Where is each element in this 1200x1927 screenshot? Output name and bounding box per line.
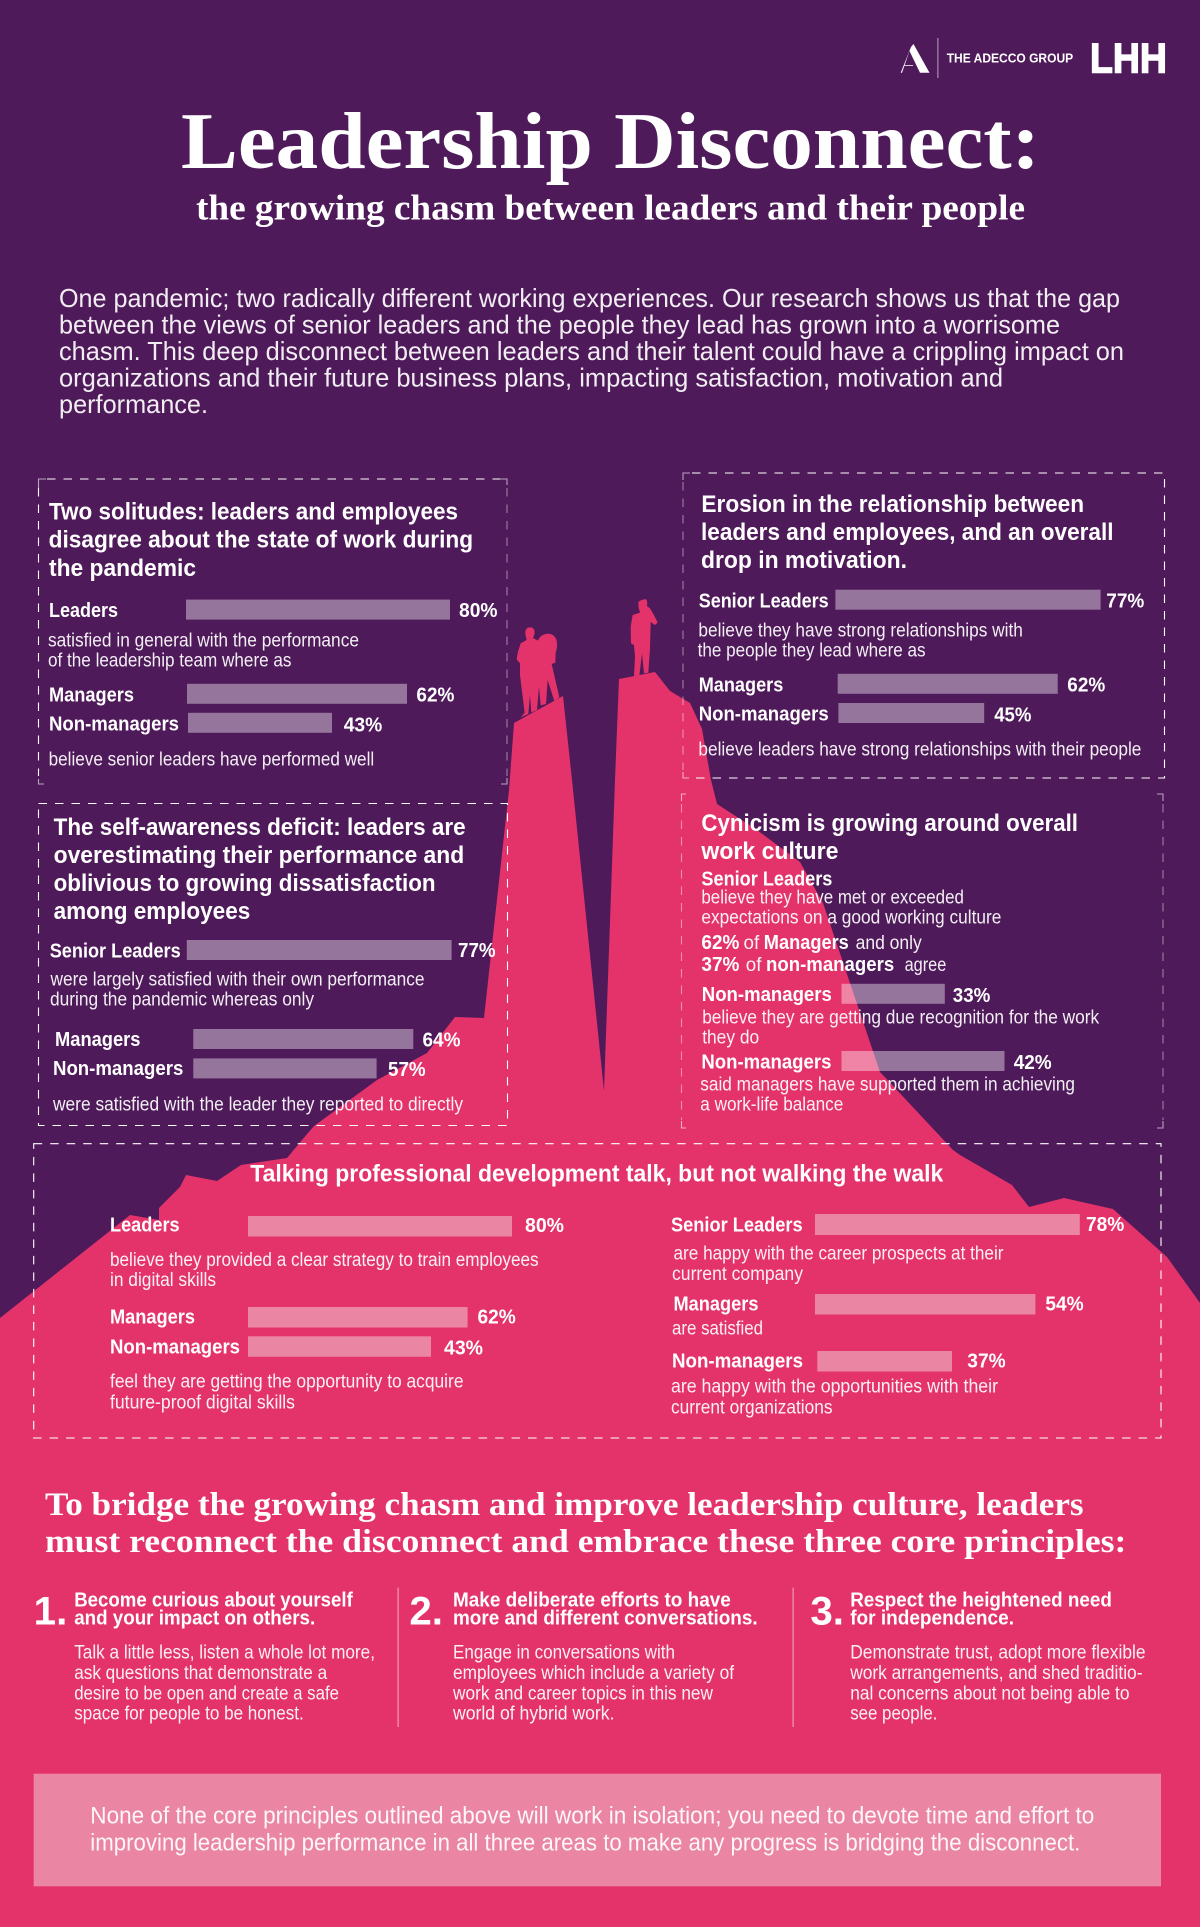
bar: managers 62%: 62% bbox=[1067, 675, 1106, 697]
description: satisfied in general with the performance bbox=[48, 630, 359, 652]
intro paragraph bbox=[59, 283, 1124, 419]
description bbox=[700, 1074, 1075, 1116]
panel: cynicism bbox=[682, 794, 1163, 1128]
intro paragraph: organizations and their future business plans, impacting satisfaction, motivation and bbox=[59, 362, 1003, 392]
managers and non-managers statement: agree bbox=[905, 955, 946, 976]
heading: cynicism: Cynicism is growing around overall bbox=[701, 810, 1078, 837]
managers and non-managers statement: of bbox=[744, 933, 760, 954]
heading: erosion: Erosion in the relationship between bbox=[701, 491, 1084, 518]
intro paragraph: One pandemic; two radically different working experiences. Our research shows us that the gap bbox=[59, 283, 1120, 313]
bar: leaders 80%: Leaders bbox=[110, 1215, 180, 1237]
principle 3 body: see people. bbox=[850, 1703, 937, 1724]
principle 1: 1. bbox=[34, 1589, 67, 1633]
principle 1 body: space for people to be honest. bbox=[74, 1703, 304, 1724]
icon: two leaders silhouette bbox=[517, 627, 559, 717]
principle 2 body: Engage in conversations with bbox=[453, 1642, 675, 1663]
managers and non-managers statement: 62% bbox=[701, 932, 740, 954]
description bbox=[50, 970, 425, 1010]
description: future-proof digital skills bbox=[110, 1392, 295, 1413]
senior leaders statement: Senior Leaders bbox=[701, 868, 832, 890]
description bbox=[48, 630, 359, 671]
principle 2 heading bbox=[453, 1590, 758, 1630]
bar: managers 62%: 62% bbox=[478, 1307, 516, 1329]
heading: erosion: leaders and employees, and an overall bbox=[701, 519, 1114, 546]
bar: non-managers 43%: 43% bbox=[444, 1337, 483, 1359]
description bbox=[671, 1376, 999, 1418]
principle 1 heading bbox=[74, 1590, 353, 1630]
bar: non-managers 42% bbox=[701, 1051, 1052, 1074]
description: believe they are getting due recognition for the work bbox=[702, 1007, 1100, 1028]
panel: two solitudes bbox=[38, 479, 507, 784]
heading: self-awareness deficit: oblivious to growing dissatisfaction bbox=[54, 870, 436, 897]
description: current company bbox=[672, 1264, 803, 1285]
principle 2 heading: more and different conversations. bbox=[453, 1608, 758, 1630]
description: in digital skills bbox=[110, 1270, 216, 1291]
intro paragraph: chasm. This deep disconnect between leaders and their talent could have a crippling impact on bbox=[59, 336, 1124, 366]
managers and non-managers statement bbox=[701, 932, 946, 976]
callout: None of the core principles outlined above will work in isolation; you need to devote time and effort to bbox=[90, 1802, 1094, 1829]
heading: three core principles: To bridge the growing chasm and improve leadership culture, leaders bbox=[45, 1487, 1084, 1523]
bar: managers 62% bbox=[699, 674, 1106, 697]
description: current organizations bbox=[671, 1397, 832, 1418]
principle 3 bbox=[810, 1589, 1146, 1724]
managers and non-managers statement: Managers bbox=[764, 932, 849, 954]
bar: non-managers 57%: Non-managers bbox=[53, 1058, 183, 1080]
bar: leaders 80%: 80% bbox=[459, 600, 498, 622]
description: during the pandemic whereas only bbox=[50, 990, 314, 1010]
callout bbox=[34, 1774, 1161, 1886]
principle 3: 3. bbox=[810, 1589, 844, 1633]
description: are happy with the opportunities with their bbox=[671, 1376, 999, 1397]
bar: senior leaders 77% bbox=[50, 940, 496, 962]
panel: self-awareness deficit bbox=[38, 804, 508, 1126]
logo: The Adecco Group and LHH bbox=[901, 35, 1167, 82]
heading: three core principles bbox=[45, 1487, 1126, 1560]
bar: senior leaders 77%: 77% bbox=[458, 940, 496, 962]
callout: improving leadership performance in all three areas to make any progress is bridging the disconnect. bbox=[90, 1830, 1080, 1857]
bar: non-managers 42%: Non-managers bbox=[701, 1051, 831, 1073]
bar: non-managers 37%: 37% bbox=[967, 1351, 1006, 1373]
principle 3 body: work arrangements, and shed traditio- bbox=[849, 1663, 1142, 1684]
description: they do bbox=[702, 1027, 759, 1048]
bar: non-managers 37%: Non-managers bbox=[672, 1351, 803, 1373]
managers and non-managers statement: 37% bbox=[701, 954, 740, 976]
senior leaders statement: believe they have met or exceeded bbox=[701, 888, 964, 909]
principle 2 body bbox=[452, 1642, 735, 1724]
managers and non-managers statement: non-managers bbox=[766, 954, 894, 976]
principle 1 heading: and your impact on others. bbox=[74, 1608, 315, 1630]
description bbox=[110, 1372, 464, 1413]
description bbox=[110, 1250, 539, 1291]
bar: leaders 80%: 80% bbox=[525, 1215, 564, 1237]
bar: non-managers 45% bbox=[699, 703, 1032, 726]
bar: senior leaders 77%: 77% bbox=[1106, 590, 1145, 612]
subtitle: the growing chasm between leaders and their people bbox=[196, 187, 1025, 227]
description: the people they lead where as bbox=[698, 640, 926, 661]
principle 1 body: Talk a little less, listen a whole lot more, bbox=[74, 1642, 375, 1663]
bar: non-managers 57% bbox=[53, 1058, 426, 1081]
bar: managers 64%: 64% bbox=[422, 1029, 461, 1051]
principle 2 body: work and career topics in this new bbox=[452, 1683, 713, 1704]
description: believe they have strong relationships with bbox=[698, 620, 1023, 642]
heading: self-awareness deficit: among employees bbox=[54, 898, 250, 925]
bar: senior leaders 78%: 78% bbox=[1086, 1214, 1125, 1236]
intro paragraph: between the views of senior leaders and the people they lead has grown into a worrisome bbox=[59, 310, 1060, 340]
principle 2 body: employees which include a variety of bbox=[453, 1663, 735, 1684]
bar: leaders 80% bbox=[110, 1215, 564, 1237]
bar: senior leaders 78% bbox=[671, 1214, 1125, 1236]
heading: two solitudes: the pandemic bbox=[49, 555, 196, 582]
principle 3 heading bbox=[850, 1590, 1112, 1630]
description: believe leaders have strong relationships with their people bbox=[698, 739, 1141, 760]
principle 2 heading: Make deliberate efforts to have bbox=[453, 1590, 731, 1612]
bar: senior leaders 77%: Senior Leaders bbox=[50, 940, 181, 962]
bar: managers 64%: Managers bbox=[55, 1029, 140, 1051]
bar: non-managers 43% bbox=[110, 1336, 483, 1359]
bar: non-managers 43%: Non-managers bbox=[110, 1336, 240, 1358]
principle 1 body: desire to be open and create a safe bbox=[74, 1683, 339, 1704]
panel: erosion in the relationship bbox=[683, 473, 1164, 778]
heading: two solitudes: disagree about the state of work during bbox=[49, 527, 473, 554]
heading: three core principles: must reconnect the disconnect and embrace these three core principles: bbox=[45, 1524, 1126, 1560]
heading: erosion: drop in motivation. bbox=[701, 547, 907, 574]
bar: non-managers 45%: 45% bbox=[994, 704, 1032, 726]
heading: two solitudes: Two solitudes: leaders and employees bbox=[49, 498, 458, 525]
principle 1 heading: Become curious about yourself bbox=[74, 1590, 353, 1612]
principle 3 heading: for independence. bbox=[850, 1608, 1014, 1630]
managers and non-managers statement: of bbox=[746, 955, 762, 976]
bar: non-managers 43% bbox=[49, 713, 382, 736]
bar: managers 62% bbox=[49, 684, 455, 706]
bar: non-managers 33%: 33% bbox=[953, 985, 991, 1007]
principle 3 heading: Respect the heightened need bbox=[850, 1590, 1112, 1612]
senior leaders statement bbox=[701, 868, 1001, 929]
bar: managers 62%: Managers bbox=[699, 675, 783, 697]
bar: non-managers 37% bbox=[672, 1351, 1006, 1373]
bar: leaders 80% bbox=[49, 600, 498, 622]
heading: self-awareness deficit: overestimating their performance and bbox=[54, 842, 464, 869]
description: are satisfied bbox=[672, 1318, 763, 1339]
logo: The Adecco Group and LHH: THE ADECCO GROUP bbox=[947, 51, 1073, 65]
principle 2: 2. bbox=[409, 1589, 443, 1633]
description: feel they are getting the opportunity to acquire bbox=[110, 1372, 464, 1393]
heading: cynicism bbox=[700, 810, 1078, 865]
bar: non-managers 43%: Non-managers bbox=[49, 714, 179, 736]
description: of the leadership team where as bbox=[48, 650, 292, 671]
description: a work-life balance bbox=[700, 1094, 843, 1116]
heading: self-awareness deficit bbox=[54, 814, 466, 925]
description: were satisfied with the leader they reported to directly bbox=[52, 1094, 463, 1116]
mountain chasm illustration bbox=[0, 599, 1200, 1927]
bar: senior leaders 77%: Senior Leaders bbox=[699, 590, 829, 612]
managers and non-managers statement: and only bbox=[856, 933, 922, 954]
bar: non-managers 33% bbox=[702, 984, 991, 1007]
bar: senior leaders 78%: Senior Leaders bbox=[671, 1214, 803, 1236]
panel: professional development bbox=[34, 1144, 1161, 1438]
description: are happy with the career prospects at their bbox=[674, 1244, 1004, 1265]
principle 1 body: ask questions that demonstrate a bbox=[74, 1663, 328, 1684]
mountain shape bbox=[0, 672, 1200, 1927]
bar: managers 62%: Managers bbox=[49, 684, 134, 706]
bar: non-managers 57%: 57% bbox=[388, 1059, 426, 1081]
description: said managers have supported them in achieving bbox=[700, 1074, 1075, 1096]
bar: non-managers 45%: Non-managers bbox=[699, 704, 829, 726]
bar: non-managers 43%: 43% bbox=[344, 714, 382, 736]
icon: lone leader silhouette bbox=[631, 599, 658, 676]
principle 1 body bbox=[74, 1642, 375, 1724]
description: believe they provided a clear strategy to train employees bbox=[110, 1250, 539, 1271]
principle 1 bbox=[34, 1589, 375, 1724]
principle 3 body: Demonstrate trust, adopt more flexible bbox=[850, 1642, 1146, 1663]
title: Leadership Disconnect: bbox=[181, 98, 1040, 186]
bar: non-managers 33%: Non-managers bbox=[702, 984, 832, 1006]
description bbox=[698, 620, 1023, 661]
bar: managers 54%: 54% bbox=[1045, 1294, 1084, 1316]
bar: non-managers 42%: 42% bbox=[1014, 1052, 1052, 1074]
logo: The Adecco Group and LHH: LHH bbox=[1090, 35, 1167, 82]
principle 2 bbox=[409, 1589, 758, 1724]
heading: erosion bbox=[701, 491, 1114, 574]
bar: leaders 80%: Leaders bbox=[49, 600, 118, 622]
bar: managers 54% bbox=[674, 1294, 1084, 1316]
heading: cynicism: work culture bbox=[700, 838, 838, 865]
description bbox=[702, 1007, 1100, 1048]
intro paragraph: performance. bbox=[59, 389, 208, 419]
senior leaders statement: expectations on a good working culture bbox=[701, 908, 1001, 929]
description: believe senior leaders have performed well bbox=[49, 749, 374, 770]
bar: managers 62%: 62% bbox=[416, 684, 455, 706]
principle 2 body: world of hybrid work. bbox=[452, 1703, 614, 1724]
bar: managers 64% bbox=[55, 1029, 461, 1051]
description: were largely satisfied with their own performance bbox=[50, 970, 425, 991]
bar: senior leaders 77% bbox=[699, 590, 1145, 612]
heading: self-awareness deficit: The self-awareness deficit: leaders are bbox=[54, 814, 466, 841]
bar: managers 54%: Managers bbox=[674, 1294, 758, 1316]
description bbox=[672, 1244, 1004, 1285]
heading: two solitudes bbox=[49, 498, 473, 582]
heading: professional development: Talking professional development talk, but not walking the walk bbox=[250, 1161, 944, 1188]
principle 3 body: nal concerns about not being able to bbox=[850, 1683, 1130, 1704]
bar: managers 62%: Managers bbox=[110, 1307, 195, 1329]
principle 3 body bbox=[849, 1642, 1146, 1724]
icon: Adecco A mark bbox=[901, 44, 930, 73]
bar: managers 62% bbox=[110, 1307, 516, 1329]
